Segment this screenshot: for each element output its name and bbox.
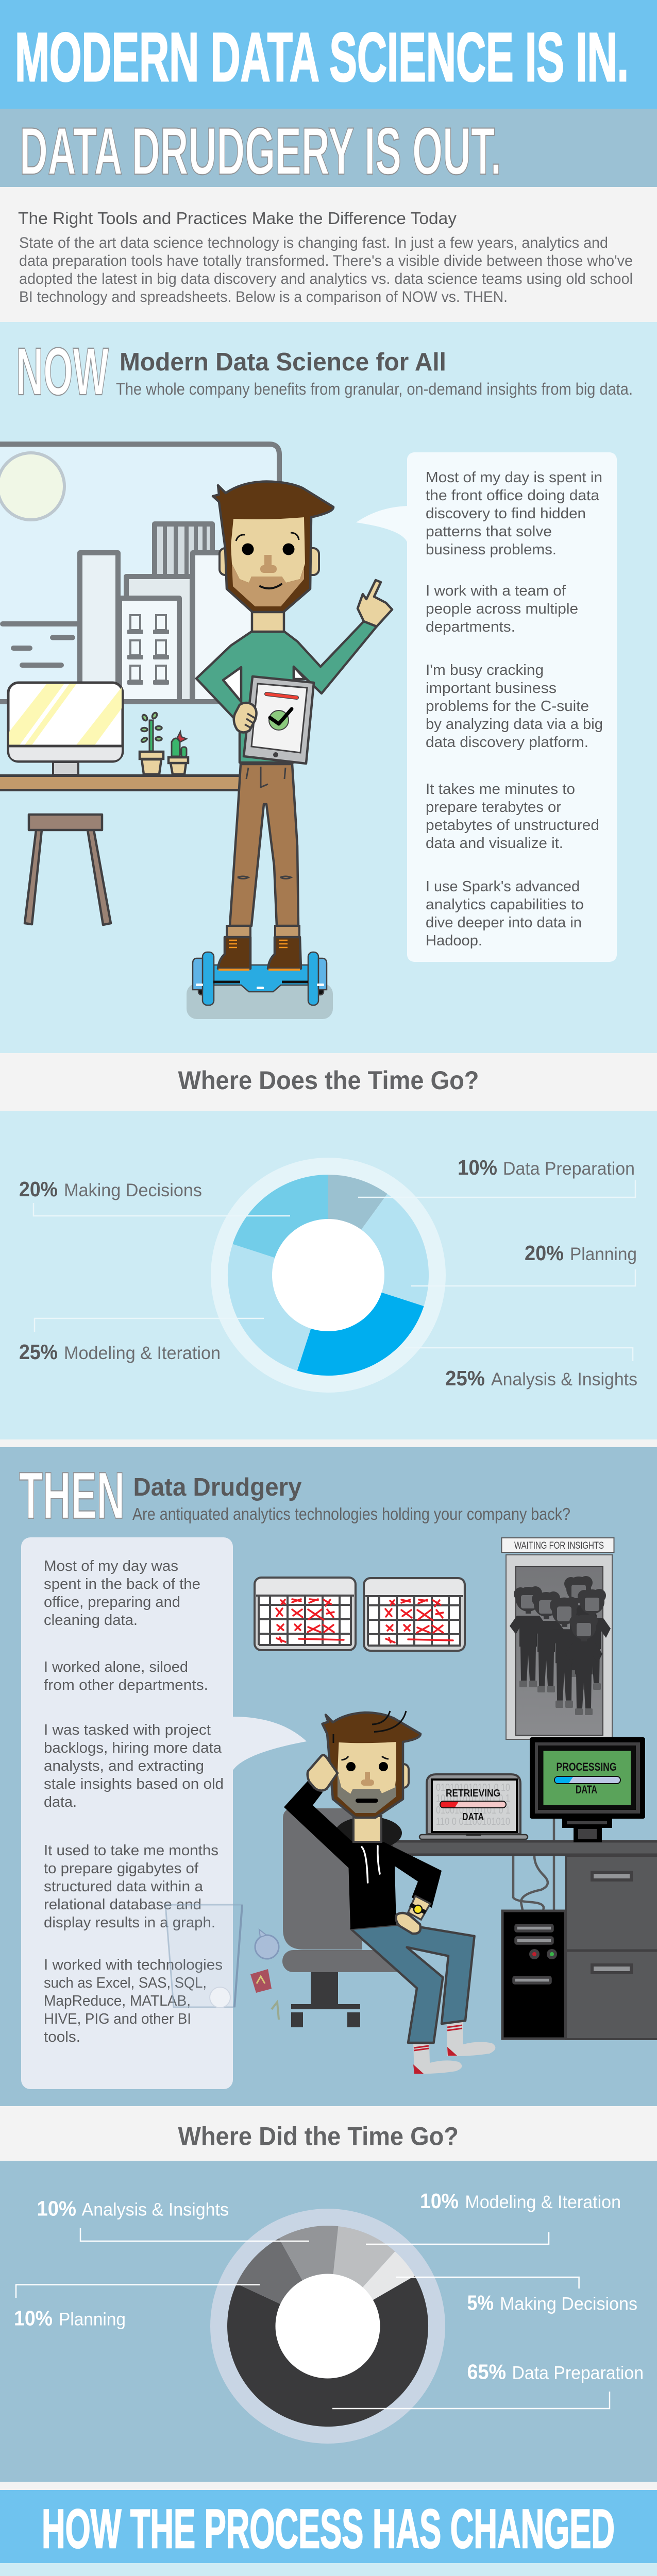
boots <box>227 926 250 937</box>
hoodie <box>284 1781 442 1929</box>
laptop: retrieving data <box>427 1774 520 1834</box>
wrist and watch <box>408 1896 430 1920</box>
speech bubble: NOW description: data and visualize it. <box>426 835 563 852</box>
legs <box>230 764 298 926</box>
sweater <box>196 621 377 762</box>
THEN heading: Data Drudgery <box>133 1473 302 1501</box>
illustration: office chair <box>282 1808 406 2027</box>
speech bubble: THEN description: relational database and <box>44 1896 201 1913</box>
speech bubble: THEN description: from other departments. <box>44 1677 208 1693</box>
sun <box>0 453 64 520</box>
label: 65% data preparation: 65% <box>467 2360 506 2384</box>
monitor: processing data <box>562 1819 612 1828</box>
label: 25% modeling and iteration: 25% <box>19 1340 58 1364</box>
intro text panel: BI technology and spreadsheets. Below is a comparison of NOW vs. THEN. <box>19 289 508 306</box>
face <box>338 1742 396 1794</box>
speech bubble: NOW description: problems for the C-suite <box>426 698 589 715</box>
label: 25% modeling and iteration <box>19 1318 264 1364</box>
speech bubble: THEN description: to prepare gigabytes of <box>44 1860 199 1877</box>
speech bubble: THEN description: It used to take me months <box>44 1842 218 1859</box>
label: 20% planning <box>411 1241 637 1286</box>
label: 10% analysis and insights: 10% <box>37 2197 76 2221</box>
hair and beard outline <box>323 1713 420 1818</box>
speech bubble: THEN description: Most of my day was <box>44 1558 178 1574</box>
heading band: where did the time go: Where Did the Time Go? <box>178 2122 459 2150</box>
speech bubble: NOW description: I'm busy cracking <box>426 662 544 679</box>
ears <box>220 548 233 575</box>
speech bubble: NOW description: the front office doing data <box>426 487 600 504</box>
heading band: where did the time go <box>0 2106 657 2161</box>
speech bubble: THEN description: tools. <box>44 2029 80 2045</box>
label: 25% modeling and iteration: Modeling & Iteration <box>64 1343 221 1363</box>
speech bubble: THEN description: spent in the back of the <box>44 1576 200 1592</box>
donut chart: NOW time split <box>211 1158 446 1393</box>
THEN heading: THEN <box>19 1459 125 1533</box>
computer tower <box>502 1911 565 2039</box>
speech bubble: THEN description: such as Excel, SAS, SQL, <box>44 1975 207 1991</box>
label: 5% making decisions <box>396 2277 637 2315</box>
illustration: waiting for insights poster <box>502 1538 614 1739</box>
THEN section background <box>0 1447 657 2106</box>
speech bubble: NOW description: data discovery platform. <box>426 734 588 751</box>
speech bubble: NOW description: prepare terabytes or <box>426 799 561 816</box>
label: 20% making decisions: Making Decisions <box>64 1180 202 1200</box>
speech bubble: NOW description: It takes me minutes to <box>426 781 575 798</box>
hoverboard <box>193 952 327 1005</box>
tablet <box>244 676 314 764</box>
label: 10% planning <box>14 2285 260 2330</box>
cabinet <box>566 1856 657 2039</box>
donut section background NOW <box>0 1111 657 1439</box>
ear <box>397 1764 409 1788</box>
illustration: office desk with cabinet and tower: RETRIEVING <box>446 1788 500 1799</box>
eyes, brows, nose, mouth <box>346 1762 356 1771</box>
socks <box>447 2022 495 2056</box>
speech bubble: NOW description <box>356 452 617 962</box>
label: 10% data preparation <box>358 1156 635 1197</box>
speech bubble: THEN description: office, preparing and <box>44 1594 180 1611</box>
speech bubble: NOW description: people across multiple <box>426 601 578 617</box>
illustration: data scientist on hoverboard <box>187 481 392 1019</box>
label: 10% modeling and iteration: Modeling & Iteration <box>465 2192 621 2212</box>
heading band: where does the time go <box>0 1053 657 1111</box>
speech bubble: NOW description: patterns that solve <box>426 523 552 540</box>
stool <box>25 815 111 925</box>
jeans <box>351 1925 475 2043</box>
label: 10% planning: Planning <box>59 2310 126 2330</box>
wind lines <box>3 624 77 665</box>
monitor <box>53 762 78 775</box>
speech bubble: THEN description: display results in a graph. <box>44 1914 215 1931</box>
illustration: stressed analyst in chair <box>284 1711 495 2074</box>
illustration: office desk with cabinet and tower: 0100101010101 0 1 <box>436 1805 510 1816</box>
label: 65% data preparation <box>332 2360 644 2409</box>
speech bubble: NOW description: business problems. <box>426 541 557 558</box>
NOW heading <box>16 333 633 409</box>
speech bubble: NOW description: departments. <box>426 619 515 635</box>
speech bubble: THEN description: structured data within a <box>44 1878 204 1895</box>
title banner: modern data science is in <box>0 0 657 109</box>
desk top <box>0 776 245 790</box>
THEN heading: Are antiquated analytics technologies holding your company back? <box>132 1504 570 1523</box>
poles and cables <box>513 1818 554 1911</box>
label: 20% planning: 20% <box>525 1241 564 1265</box>
skyline buildings <box>80 524 279 702</box>
speech bubble: NOW description: I work with a team of <box>426 583 566 599</box>
heading band: where does the time go: Where Does the Time Go? <box>178 1066 479 1095</box>
label: 25% analysis and insights: Analysis & Insights <box>491 1369 637 1389</box>
illustration: office desk with cabinet and tower: DATA <box>462 1811 484 1823</box>
label: 10% planning: 10% <box>14 2307 53 2330</box>
speech bubble: NOW description: I use Spark's advanced <box>426 878 580 895</box>
speech bubble: NOW description: petabytes of unstructured <box>426 817 599 834</box>
label: 10% modeling and iteration <box>366 2189 621 2244</box>
hair and beard outline <box>213 481 333 612</box>
speech bubble: THEN description: HIVE, PIG and other BI <box>44 2011 191 2027</box>
holding hand <box>234 703 257 733</box>
plant pot <box>142 759 161 774</box>
speech bubble: NOW description: Most of my day is spent in <box>426 469 602 486</box>
speech bubble: THEN description <box>21 1537 307 2089</box>
speech bubble: NOW description: analytics capabilities to <box>426 896 584 913</box>
speech bubble: THEN description: I worked with technologies <box>44 1957 223 1973</box>
cactus pot <box>171 763 186 774</box>
label: 10% data preparation: 10% <box>458 1156 497 1179</box>
label: 65% data preparation: Data Preparation <box>512 2363 644 2383</box>
label: 5% making decisions: Making Decisions <box>500 2294 637 2314</box>
speech bubble: THEN description: analysts, and extracting <box>44 1758 204 1774</box>
THEN heading <box>19 1459 570 1533</box>
label: 10% data preparation: Data Preparation <box>503 1159 635 1179</box>
label: 20% making decisions <box>19 1177 290 1216</box>
NOW heading: NOW <box>16 333 109 409</box>
intro text panel: The Right Tools and Practices Make the Difference Today <box>18 209 457 228</box>
raised fist <box>308 1755 338 1791</box>
speech bubble: THEN description: I was tasked with project <box>44 1722 211 1738</box>
label: 25% analysis and insights <box>405 1348 637 1390</box>
illustration: office desk with cabinet and tower <box>392 1737 657 2039</box>
neck <box>353 1816 381 1842</box>
eyes, brows, nose, mouth <box>242 543 254 555</box>
illustration: crossed-out calendars <box>255 1578 465 1651</box>
donut chart: THEN time split <box>210 2209 445 2444</box>
process NOW background <box>0 2563 657 2576</box>
speech bubble: NOW description: discovery to find hidden <box>426 505 586 522</box>
illustration: desk with monitor, plants and stool <box>0 683 245 925</box>
label: 10% analysis and insights: Analysis & Insights <box>81 2200 229 2220</box>
NOW heading: Modern Data Science for All <box>120 348 446 376</box>
illustration: office desk with cabinet and tower: 1010101011001 0 1 <box>436 1793 510 1804</box>
intro text panel: State of the art data science technology is changing fast. In just a few years, analytics and <box>19 234 608 251</box>
hood <box>335 1817 402 1850</box>
illustration: office desk with cabinet and tower: PROCESSING <box>557 1760 616 1773</box>
desk top <box>392 1841 657 1855</box>
label: 25% analysis and insights: 25% <box>445 1366 485 1390</box>
label: 20% making decisions: 20% <box>19 1177 58 1201</box>
face <box>231 517 305 583</box>
label: 5% making decisions: 5% <box>467 2291 494 2315</box>
speech bubble: THEN description: backlogs, hiring more data <box>44 1740 222 1756</box>
speech bubble: THEN description: I worked alone, siloed <box>44 1659 188 1675</box>
speech bubble: NOW description: dive deeper into data in <box>426 914 582 931</box>
speech bubble: NOW description: by analyzing data via a big <box>426 716 603 733</box>
label: 10% analysis and insights <box>37 2197 309 2241</box>
donut section background THEN <box>0 2161 657 2482</box>
illustration: office desk with cabinet and tower: DATA <box>576 1783 597 1796</box>
intro text panel: data preparation tools have totally transformed. There's a visible divide between those who've <box>19 252 633 269</box>
NOW section background <box>0 322 657 1053</box>
speech bubble: NOW description: Hadoop. <box>426 933 482 949</box>
speech bubble: THEN description: cleaning data. <box>44 1612 138 1629</box>
icon: waste bin with crumpled paper <box>165 1905 279 2020</box>
speech bubble: NOW description: important business <box>426 680 557 697</box>
speech bubble: THEN description: data. <box>44 1794 77 1810</box>
speech bubble: THEN description: stale insights based on old <box>44 1776 224 1792</box>
speech bubble: THEN description: MapReduce, MATLAB, <box>44 1993 191 2009</box>
label: 20% planning: Planning <box>570 1244 637 1264</box>
pointing hand <box>358 580 392 626</box>
resting hand <box>396 1913 420 1934</box>
illustration: city window <box>0 444 279 702</box>
intro text panel <box>0 187 657 322</box>
label: 10% modeling and iteration: 10% <box>420 2189 459 2213</box>
hoverboard shadow <box>187 984 333 1019</box>
illustration: office desk with cabinet and tower: 010101010101 0 10 <box>436 1782 510 1793</box>
illustration: office desk with cabinet and tower: 110 0 01100101010 <box>436 1816 510 1827</box>
illustration: waiting for insights poster: WAITING FOR INSIGHTS <box>514 1540 604 1551</box>
neck <box>252 611 284 632</box>
intro text panel: adopted the latest in big data discovery and analytics vs. data science teams using old school <box>19 270 633 287</box>
